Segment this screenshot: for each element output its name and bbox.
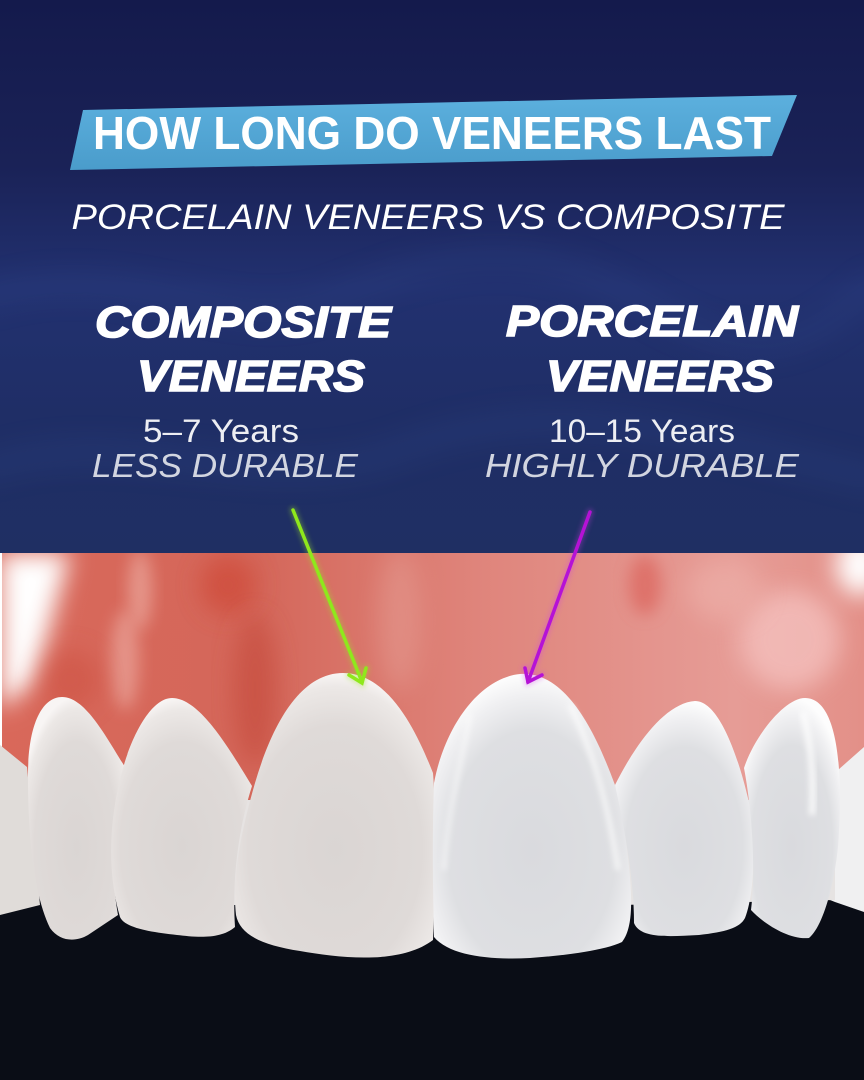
composite veneers column: 5–7 Years [143,413,299,449]
arrow: composite [293,510,366,683]
arrow: porcelain [525,512,590,682]
composite veneers column [92,298,393,484]
porcelain veneer tooth [433,674,631,958]
composite veneers column: COMPOSITE [95,298,393,347]
porcelain veneers column [485,297,800,484]
lateral tooth, left [28,697,125,940]
composite veneer tooth [235,673,435,958]
title banner [70,95,797,170]
far right tooth [825,747,864,912]
porcelain veneers column: PORCELAIN [506,297,799,346]
composite veneers column: VENEERS [137,352,365,401]
subtitle: PORCELAIN VENEERS VS COMPOSITE [72,198,785,237]
gums [0,553,864,800]
third tooth, right [615,701,754,936]
tooth backing [112,790,835,905]
far left tooth [0,745,40,915]
composite veneers column: LESS DURABLE [92,447,359,484]
fourth tooth, right [744,698,840,938]
porcelain veneers column: VENEERS [546,352,774,401]
title banner: HOW LONG DO VENEERS LAST [93,107,771,159]
porcelain veneers column: 10–15 Years [549,413,735,449]
porcelain veneers column: HIGHLY DURABLE [485,447,800,484]
second tooth, left [111,698,252,937]
